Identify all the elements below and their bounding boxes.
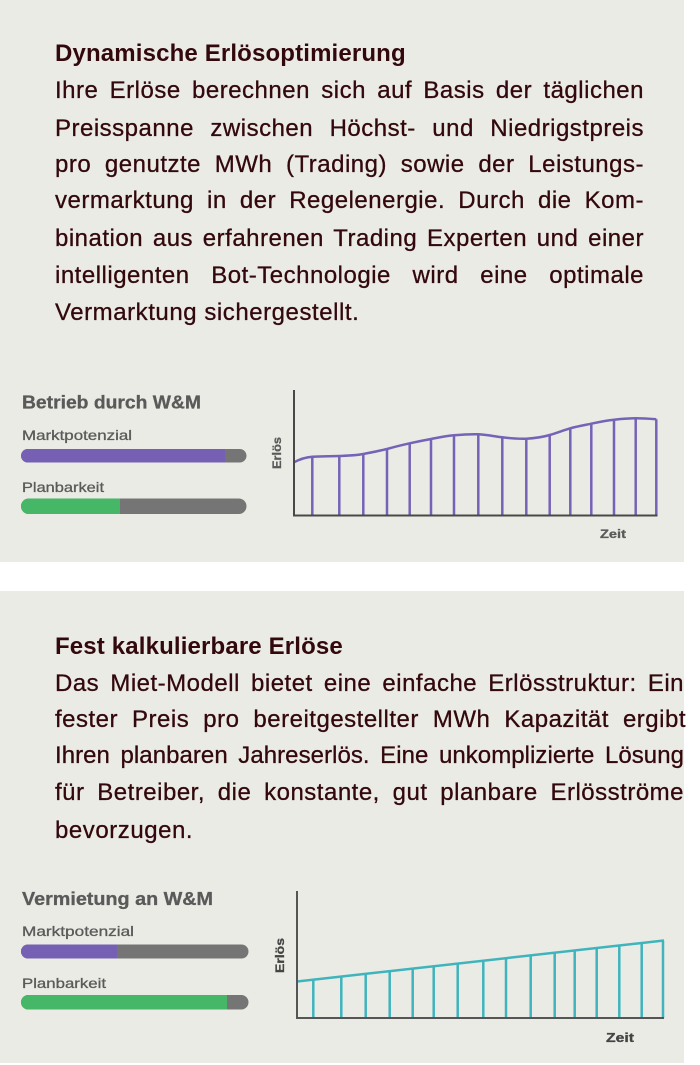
body line 7: Vermarktung sichergestellt. — [55, 299, 359, 326]
bar: Marktpotenzial — [21, 449, 246, 462]
body line 4: für Betreiber, die konstante, gut planbare Erlösströme — [55, 779, 684, 806]
body line 3: Ihren planbaren Jahreserlös. Eine unkomplizierte Lösung — [55, 742, 684, 769]
panel: fest kalkulierbare Erlöse — [0, 591, 684, 1063]
body line 1: Das Miet-Modell bietet eine einfache Erlösstruktur: Ein — [55, 670, 684, 697]
rating block: Betrieb durch W&M — [21, 392, 246, 514]
label: Marktpotenzial: Marktpotenzial — [22, 923, 134, 939]
rating title: Betrieb durch W&M — [22, 392, 201, 412]
heading: Dynamische Erlösoptimierung: Dynamische Erlösoptimierung — [55, 40, 406, 67]
chart axes — [294, 390, 658, 516]
rating block: Vermietung an W&M — [21, 889, 248, 1010]
y axis label: Erlös — [273, 938, 287, 973]
bar: Marktpotenzial — [21, 944, 248, 958]
line chart: Erlös over Zeit, dynamic — [270, 390, 658, 541]
chart line — [297, 940, 664, 982]
panel: dynamische Erlösoptimierung — [0, 0, 684, 562]
label: Planbarkeit: Planbarkeit — [22, 975, 106, 991]
bar: Planbarkeit — [21, 498, 246, 514]
body line 3: pro genutzte MWh (Trading) sowie der Leistungs- — [55, 151, 644, 178]
x axis label: Zeit — [600, 527, 626, 541]
body line 6: intelligenten Bot-Technologie wird eine optimale — [55, 262, 644, 289]
body line 2: fester Preis pro bereitgestellter MWh Kapazität ergibt — [55, 706, 686, 733]
rating title: Vermietung an W&M — [22, 889, 213, 909]
body line 4: vermarktung in der Regelenergie. Durch die Kom- — [55, 187, 644, 214]
body line 5: bination aus erfahrenen Trading Experten und einer — [55, 225, 644, 252]
chart bars — [313, 941, 663, 1018]
line chart: Erlös over Zeit, rental — [273, 891, 664, 1045]
y axis label: Erlös — [270, 437, 284, 469]
chart bars — [312, 418, 656, 515]
heading: Fest kalkulierbare Erlöse: Fest kalkulierbare Erlöse — [55, 633, 343, 660]
chart axes — [297, 891, 664, 1018]
label: Planbarkeit: Planbarkeit — [22, 479, 104, 495]
bar: Planbarkeit — [21, 995, 248, 1010]
chart curve — [294, 418, 656, 462]
x axis label: Zeit — [606, 1030, 635, 1045]
text block: dynamische Erlösoptimierung — [54, 40, 644, 326]
body line 1: Ihre Erlöse berechnen sich auf Basis der täglichen — [55, 77, 644, 104]
body line 2: Preisspanne zwischen Höchst- und Niedrigstpreis — [55, 115, 644, 142]
label: Marktpotenzial: Marktpotenzial — [22, 427, 132, 443]
body line 5: bevorzugen. — [55, 817, 193, 844]
